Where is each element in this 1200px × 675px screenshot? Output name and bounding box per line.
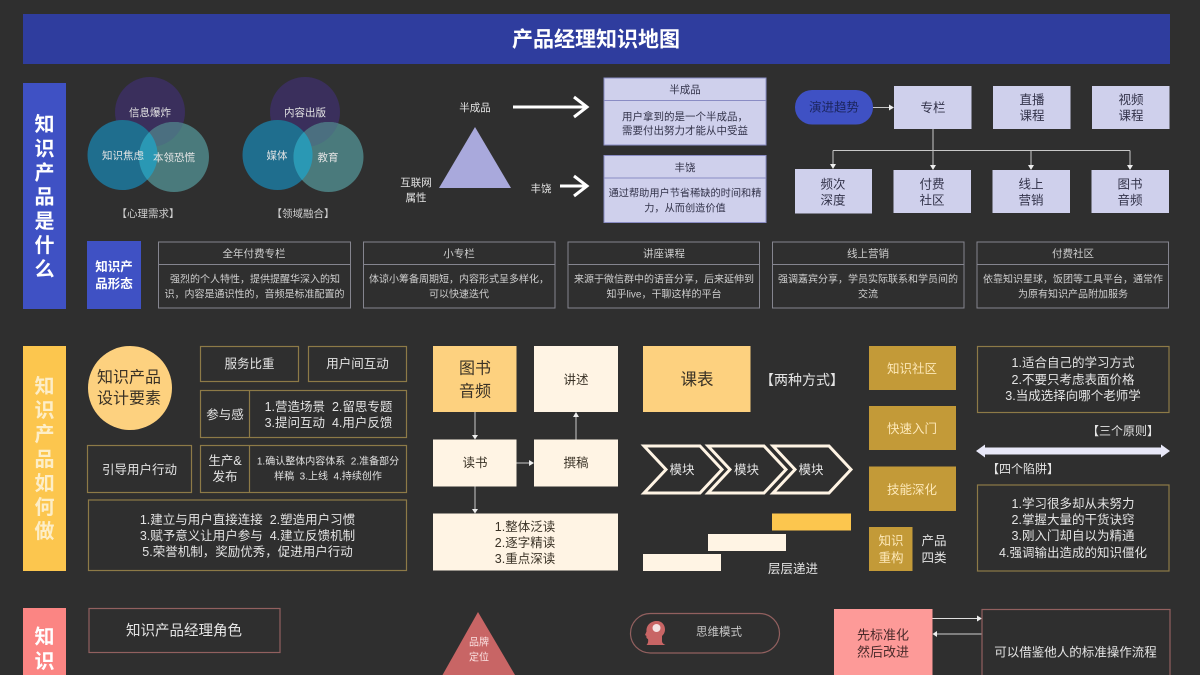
- box: 付费社区: 付费: [919, 178, 945, 192]
- panel: 半成品 explanation: 需要付出努力才能从中受益: [622, 124, 748, 137]
- pill: 演进趋势: 演进趋势: [809, 100, 859, 114]
- box: 视频课程: 课程: [1118, 108, 1144, 123]
- card: 线上营销: 强调嘉宾分享，学员实际联系和学员间的: [778, 272, 958, 286]
- chevron chain: modules: 模块: [734, 463, 759, 477]
- box: standardize then improve: 然后改进: [857, 644, 909, 660]
- icon: head with gear: [645, 621, 666, 645]
- panel: 半成品 explanation: 用户拿到的是一个半成品，: [622, 110, 748, 123]
- text: four product types: 产品: [921, 534, 947, 548]
- box: four traps: 4.强调输出造成的知识僵化: [999, 545, 1147, 560]
- card: 付费社区: [977, 242, 1168, 308]
- card: 付费社区: 依靠知识星球，饭团等工具平台，通常作: [983, 272, 1163, 286]
- connector arrows: [830, 104, 1133, 170]
- box: 撰稿: 撰稿: [563, 455, 589, 470]
- section label: cropped 知识: [23, 608, 66, 675]
- section label: 知识产品如何做: 做: [34, 520, 54, 543]
- box: 知识重构: 知识: [878, 534, 904, 548]
- box: 技能深化: [869, 466, 956, 511]
- box: 图书音频: 音频: [459, 382, 491, 400]
- section label: 知识产品是什么: 么: [34, 258, 54, 281]
- box: borrow standard process: 可以借鉴他人的标准操作流程: [994, 644, 1157, 660]
- panel: 半成品 explanation: [604, 78, 766, 145]
- box: 图书音频: [1092, 170, 1169, 213]
- double arrow: [976, 444, 1170, 458]
- card: 讲座课程: [568, 242, 760, 308]
- section label: 知识产品是什么: 知: [34, 113, 54, 136]
- panel: 丰饶 explanation: 通过帮助用户节省稀缺的时间和精: [609, 186, 761, 200]
- box: four traps: 2.掌握大量的干货诀窍: [1012, 512, 1134, 527]
- box: three principles: 1.适合自己的学习方式: [1012, 355, 1135, 370]
- box: three principles: 3.当成选择向哪个老师学: [1005, 388, 1141, 403]
- box: 视频课程: [1092, 86, 1170, 129]
- card: 线上营销: 交流: [858, 288, 878, 300]
- triangle: internet attributes: 半成品: [459, 101, 491, 114]
- label: product forms: 知识产: [95, 259, 133, 274]
- box: 生产与发布: [200, 446, 406, 492]
- venn diagram: psychological needs: 知识焦虑: [102, 149, 144, 162]
- box: 视频课程: 视频: [1118, 92, 1144, 107]
- venn diagram: psychological needs: 【心理需求】: [116, 208, 180, 220]
- pill: 演进趋势: [795, 90, 873, 124]
- box: four traps: 1.学习很多却从未努力: [1012, 496, 1134, 511]
- pill: thinking mode: 思维模式: [696, 626, 742, 638]
- section label: 知识产品是什么: 识: [34, 138, 54, 160]
- box: 线上营销: 线上: [1018, 178, 1044, 192]
- box: 参与感: 3.提问互动 4.用户反馈: [265, 415, 392, 430]
- box: 付费社区: 社区: [919, 192, 945, 208]
- triangle: internet attributes: 属性: [406, 191, 426, 204]
- card: 小专栏: 体谅小筹备周期短，内容形式呈多样化，: [369, 272, 549, 286]
- section label: 知识产品是什么: 什: [34, 234, 54, 257]
- text: four product types: [921, 534, 947, 565]
- section label: 知识产品是什么: 品: [34, 186, 54, 208]
- panel: 丰饶 explanation: 力，从而创造价值: [644, 202, 726, 214]
- stepped bars: layer by layer: [643, 514, 851, 576]
- box: 快速入门: 快速入门: [887, 421, 937, 436]
- card: 线上营销: 线上营销: [847, 247, 889, 260]
- box: borrow standard process: [982, 610, 1170, 675]
- box: 直播课程: [993, 86, 1070, 129]
- venn diagram: domain fusion: [242, 77, 364, 220]
- triangle: brand positioning: [442, 612, 515, 675]
- box: product manager role: 知识产品经理角色: [126, 622, 242, 640]
- box: 参与感: 1.营造场景 2.留思专题: [265, 399, 393, 414]
- box: 图书音频: 音频: [1117, 192, 1143, 208]
- heading: three principles: 【三个原则】: [1087, 424, 1159, 438]
- box: 知识社区: 知识社区: [887, 361, 937, 376]
- circle: design elements: 设计要素: [97, 390, 161, 408]
- venn diagram: domain fusion: 【领域融合】: [272, 207, 334, 220]
- venn diagram: psychological needs: [88, 77, 209, 220]
- box: 线上营销: [992, 170, 1070, 213]
- box: 生产与发布: 1.确认整体内容体系 2.准备部分: [257, 454, 399, 468]
- venn diagram: domain fusion: 教育: [318, 151, 338, 164]
- box: 图书音频: [433, 346, 516, 412]
- box: 直播课程: 课程: [1019, 108, 1045, 123]
- section label: cropped 知识: 知: [34, 626, 54, 648]
- box: 知识社区: [869, 346, 956, 390]
- section label: 知识产品是什么: 是: [34, 211, 54, 233]
- box: reading methods: 2.逐字精读: [495, 535, 555, 550]
- flow arrows: [472, 412, 579, 514]
- heading: four traps: 【四个陷阱】: [987, 461, 1059, 476]
- card: 全年付费专栏: 识，内容是通识性的，音频是标准配置的: [164, 288, 344, 300]
- box: 用户间互动: [308, 346, 406, 382]
- pill: thinking mode: [630, 614, 780, 653]
- card: 讲座课程: 来源于微信群中的语音分享，后来延伸到: [574, 272, 754, 286]
- chevron chain: modules: [644, 446, 851, 493]
- box: 快速入门: [869, 406, 956, 450]
- triangle: internet attributes: [400, 101, 552, 204]
- box: 生产与发布: 发布: [212, 469, 238, 484]
- section label: 知识产品如何做: 产: [34, 423, 54, 446]
- section 1: what knowledge products are: [23, 77, 1170, 309]
- triangle: brand positioning: 品牌: [469, 636, 489, 648]
- box: 参与感: 参与感: [206, 407, 244, 422]
- box: 图书音频: 图书: [1117, 178, 1143, 192]
- label: product forms: 品形态: [95, 276, 133, 291]
- box: 知识重构: 重构: [878, 550, 904, 565]
- box: 讲述: [534, 346, 618, 412]
- box: 生产与发布: 样稿 3.上线 4.持续创作: [274, 470, 382, 482]
- box: user action mechanisms: 1.建立与用户直接连接 2.塑造用户习惯: [140, 512, 355, 527]
- box: 专栏: 专栏: [920, 100, 946, 115]
- section label: 知识产品如何做: 知: [34, 375, 54, 398]
- box: 用户间互动: 用户间互动: [326, 356, 389, 371]
- box: reading methods: 3.重点深读: [495, 551, 555, 566]
- box: four traps: 3.刚入门却自以为精通: [1012, 528, 1135, 543]
- heading: two methods: 【两种方式】: [760, 372, 844, 388]
- arrow: to 半成品: [513, 97, 587, 117]
- card: 付费社区: 为原有知识产品附加服务: [1018, 288, 1128, 300]
- section 3: knowledge product manager: [23, 608, 1170, 675]
- box: 撰稿: [534, 440, 618, 486]
- title banner: 产品经理知识地图: [512, 28, 680, 52]
- box: 频次深度: [795, 169, 872, 214]
- flow chart: evolution trend: [795, 86, 1170, 214]
- box: reading methods: [433, 514, 618, 570]
- box: 技能深化: 技能深化: [887, 483, 937, 497]
- venn diagram: psychological needs: 信息爆炸: [129, 106, 171, 119]
- box: 付费社区: [894, 170, 971, 213]
- chevron chain: modules: 模块: [669, 463, 695, 477]
- box: three principles: [978, 346, 1169, 412]
- venn diagram: domain fusion: 媒体: [266, 149, 288, 162]
- box: 引导用户行动: [88, 446, 192, 492]
- circle: design elements: [88, 346, 172, 430]
- box: 服务比重: [200, 346, 298, 382]
- box: standardize then improve: [834, 609, 932, 675]
- panel: 丰饶 explanation: 丰饶: [674, 161, 696, 174]
- section label: 知识产品如何做: [23, 346, 66, 571]
- card: 小专栏: [364, 242, 555, 308]
- card: 线上营销: [772, 242, 964, 308]
- card: 小专栏: 可以快速迭代: [429, 288, 489, 300]
- chevron chain: modules: 模块: [798, 463, 824, 477]
- box: 线上营销: 营销: [1018, 194, 1044, 208]
- card: 全年付费专栏: [158, 242, 350, 308]
- stepped bars: layer by layer: 层层递进: [768, 562, 818, 576]
- arrows between boxes: [932, 616, 982, 637]
- card: 全年付费专栏: 全年付费专栏: [222, 247, 286, 260]
- box: 课表: [643, 346, 750, 412]
- box: standardize then improve: 先标准化: [857, 628, 909, 642]
- box: 图书音频: 图书: [459, 360, 491, 378]
- section label: 知识产品如何做: 品: [34, 449, 54, 471]
- card: 小专栏: 小专栏: [443, 247, 475, 260]
- box: 服务比重: 服务比重: [224, 356, 275, 371]
- panel: 丰饶 explanation: [604, 156, 766, 222]
- box: product manager role: [89, 608, 280, 652]
- section label: 知识产品是什么: 产: [34, 162, 54, 184]
- box: four traps: [978, 485, 1169, 571]
- box: 读书: 读书: [462, 456, 488, 470]
- card: 讲座课程: 讲座课程: [643, 247, 685, 260]
- box: 参与感: [200, 390, 406, 438]
- circle: design elements: 知识产品: [97, 368, 161, 386]
- arrow: to 丰饶: [560, 176, 587, 196]
- box: 专栏: [894, 86, 972, 129]
- text: four product types: 四类: [921, 551, 947, 565]
- box: 读书: [433, 440, 516, 486]
- triangle: internet attributes: 丰饶: [530, 182, 552, 195]
- card: 全年付费专栏: 强烈的个人特性，提供提醒华深入的知: [170, 272, 340, 286]
- venn diagram: domain fusion: 内容出版: [284, 106, 326, 119]
- box: user action mechanisms: 3.赋予意义让用户参与 4.建立反馈机制: [140, 528, 355, 543]
- flow: reading to telling: [433, 346, 618, 570]
- venn diagram: psychological needs: 本领恐慌: [153, 151, 195, 164]
- card: 讲座课程: 知乎live，干聊这样的平台: [606, 288, 722, 300]
- box: 知识重构: [869, 527, 912, 571]
- label: product forms: [87, 241, 141, 309]
- section label: 知识产品如何做: 如: [34, 472, 54, 495]
- panel: 半成品 explanation: 半成品: [669, 83, 701, 96]
- box: 频次深度: 频次: [820, 178, 846, 192]
- triangle: internet attributes: 互联网: [400, 177, 432, 189]
- section label: cropped 知识: 识: [34, 650, 54, 673]
- box: 讲述: 讲述: [563, 372, 589, 387]
- triangle: brand positioning: 定位: [469, 650, 489, 664]
- box: 生产与发布: 生产&: [208, 454, 242, 468]
- box: user action mechanisms: 5.荣誉机制，奖励优秀，促进用户行动: [142, 544, 353, 559]
- section 2: how to make knowledge products: [23, 346, 1170, 576]
- card: 付费社区: 付费社区: [1052, 247, 1094, 260]
- box: 引导用户行动: 引导用户行动: [102, 462, 177, 477]
- box: 直播课程: 直播: [1019, 93, 1045, 107]
- box: reading methods: 1.整体泛读: [495, 519, 555, 534]
- section label: 知识产品如何做: 识: [34, 399, 54, 422]
- box: 频次深度: 深度: [820, 192, 846, 208]
- box: three principles: 2.不要只考虑表面价格: [1012, 372, 1135, 387]
- title banner: [23, 14, 1170, 64]
- section label: 知识产品如何做: 何: [34, 496, 54, 519]
- box: 课表: 课表: [680, 370, 714, 389]
- section label: 知识产品是什么: [23, 83, 66, 309]
- box: user action mechanisms: [88, 500, 406, 570]
